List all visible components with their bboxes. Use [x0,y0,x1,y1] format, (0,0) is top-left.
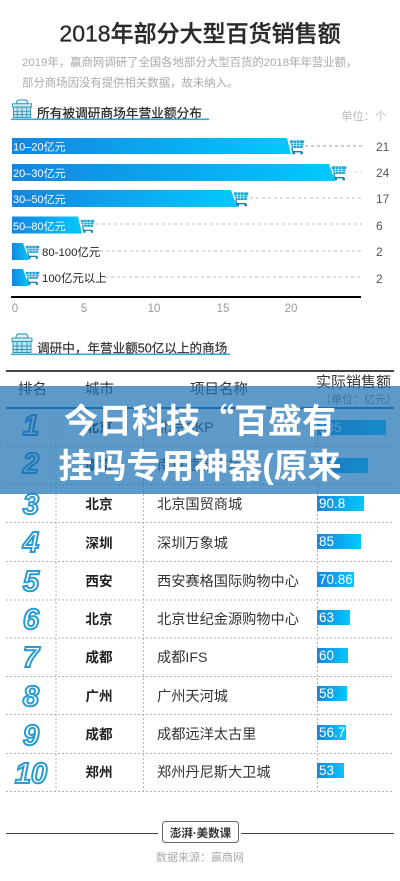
bar: 20-30 [12,164,390,181]
row 8: 58 [319,686,334,701]
x axis: 15 [217,303,229,315]
row 4 [22,527,361,559]
row 8: 8 [23,681,40,713]
bar: 80-100: 2 [376,245,383,259]
bar: 100+: 100亿元以上 [42,272,107,285]
unit label: 单位：个 [341,109,387,123]
table header: 排名 [18,381,47,398]
source note: 数据来源：赢商网 [156,850,244,864]
bar: 100+: 2 [376,272,383,286]
row 4: 深圳 [85,536,113,551]
row 4: 深圳万象城 [157,536,228,552]
bar: 80-100 [12,243,383,260]
bar: 20-30: 20–30亿元 [13,167,66,180]
title: 2018年部分大型百货销售额 [59,20,341,46]
row 3: 北京国贸商城 [157,497,242,513]
heading: malls above 5 billion [11,334,230,356]
bar: 30-50 [12,190,390,207]
row 3: 90.8 [319,496,345,511]
row 6: 北京 [85,611,113,627]
intro text: 2019年，赢商网调研了全国各地部分大型百货的2018年年营业额， [22,55,357,69]
footer logo: 澎湃·美数课 [170,826,232,840]
row 6: 6 [23,604,40,636]
row 8: 广州天河城 [157,689,228,705]
table header: 实际销售额 [316,374,391,391]
table header [18,374,397,406]
row 10: 郑州 [85,765,113,780]
row 6: 63 [319,610,334,625]
row 9: 56.7 [319,725,345,740]
x axis: 20 [285,303,297,315]
row 2 [22,448,368,480]
bar: 30-50: 17 [376,192,390,206]
heading: malls above 5 billion: 调研中，年营业额50亿以上的商场 [37,340,227,356]
row 10 [15,758,344,790]
row 5: 西安赛格国际购物中心 [157,574,299,590]
row 9: 成都 [85,726,113,742]
x axis [11,296,361,315]
row 9: 成都远洋太古里 [157,727,256,743]
table header: 城市 [85,381,114,398]
intro text [22,55,357,90]
row 4: 4 [22,527,39,559]
row 7: 60 [319,648,334,663]
row 10: 10 [15,758,47,790]
table header: 项目名称 [190,381,248,398]
bar: 10-20: 10–20亿元 [13,140,66,154]
ranking table [6,370,397,792]
overlay banner: 挂吗专用神器(原来 [58,448,342,486]
row 9: 9 [23,720,39,752]
bar: 80-100: 80-100亿元 [42,246,100,259]
bar chart: revenue distribution [11,138,390,315]
row 7: 成都IFS [157,650,207,666]
row 3: 3 [23,489,39,521]
bar: 50-80: 50–80亿元 [13,220,66,233]
row 5: 70.86 [319,572,353,587]
row 2: 2 [22,448,39,480]
bar: 20-30: 24 [376,166,390,180]
row 1: 北京SKP [157,420,214,436]
heading: all surveyed malls [11,100,209,120]
row 2: 南京德基广场 [157,457,242,474]
row 10: 53 [319,763,334,778]
x axis: 5 [81,303,87,315]
row 1: 135 [319,420,342,435]
row 3 [23,489,364,521]
overlay banner: 今日科技“百盛有 [64,394,336,443]
bar: 100+ [12,269,383,286]
row 5: 5 [23,566,40,598]
footer logo [6,822,394,842]
row 8 [23,681,347,713]
row 6 [23,604,350,636]
x axis: 10 [148,303,160,315]
row 1: 1 [23,410,39,442]
row 5 [23,566,354,598]
row 7 [23,642,348,674]
row 5: 西安 [85,573,113,589]
row 9 [23,720,346,752]
row 1 [23,410,386,442]
overlay banner [0,386,400,494]
row 3: 北京 [85,496,113,512]
row 4: 85 [319,534,334,549]
row 7: 7 [23,642,41,674]
intro text: 部分商场因没有提供相关数据，故未纳入。 [22,76,238,90]
bar: 30-50: 30–50亿元 [13,193,66,206]
row 6: 北京世纪金源购物中心 [157,612,299,628]
bar: 10-20 [12,138,390,154]
heading: all surveyed malls: 所有被调研商场年营业额分布 [37,106,202,120]
x axis: 0 [12,303,18,315]
bar: 50-80 [12,216,383,234]
bar: 10-20: 21 [376,140,390,154]
row 2: 南京 [85,457,113,473]
row 7: 成都 [85,649,113,665]
row 1: 北京 [85,419,113,435]
row 10: 郑州丹尼斯大卫城 [157,765,271,781]
row 8: 广州 [85,688,113,704]
bar: 50-80: 6 [376,219,383,233]
table header: （单位：亿元） [320,392,397,406]
row 2: 99 [319,458,334,473]
